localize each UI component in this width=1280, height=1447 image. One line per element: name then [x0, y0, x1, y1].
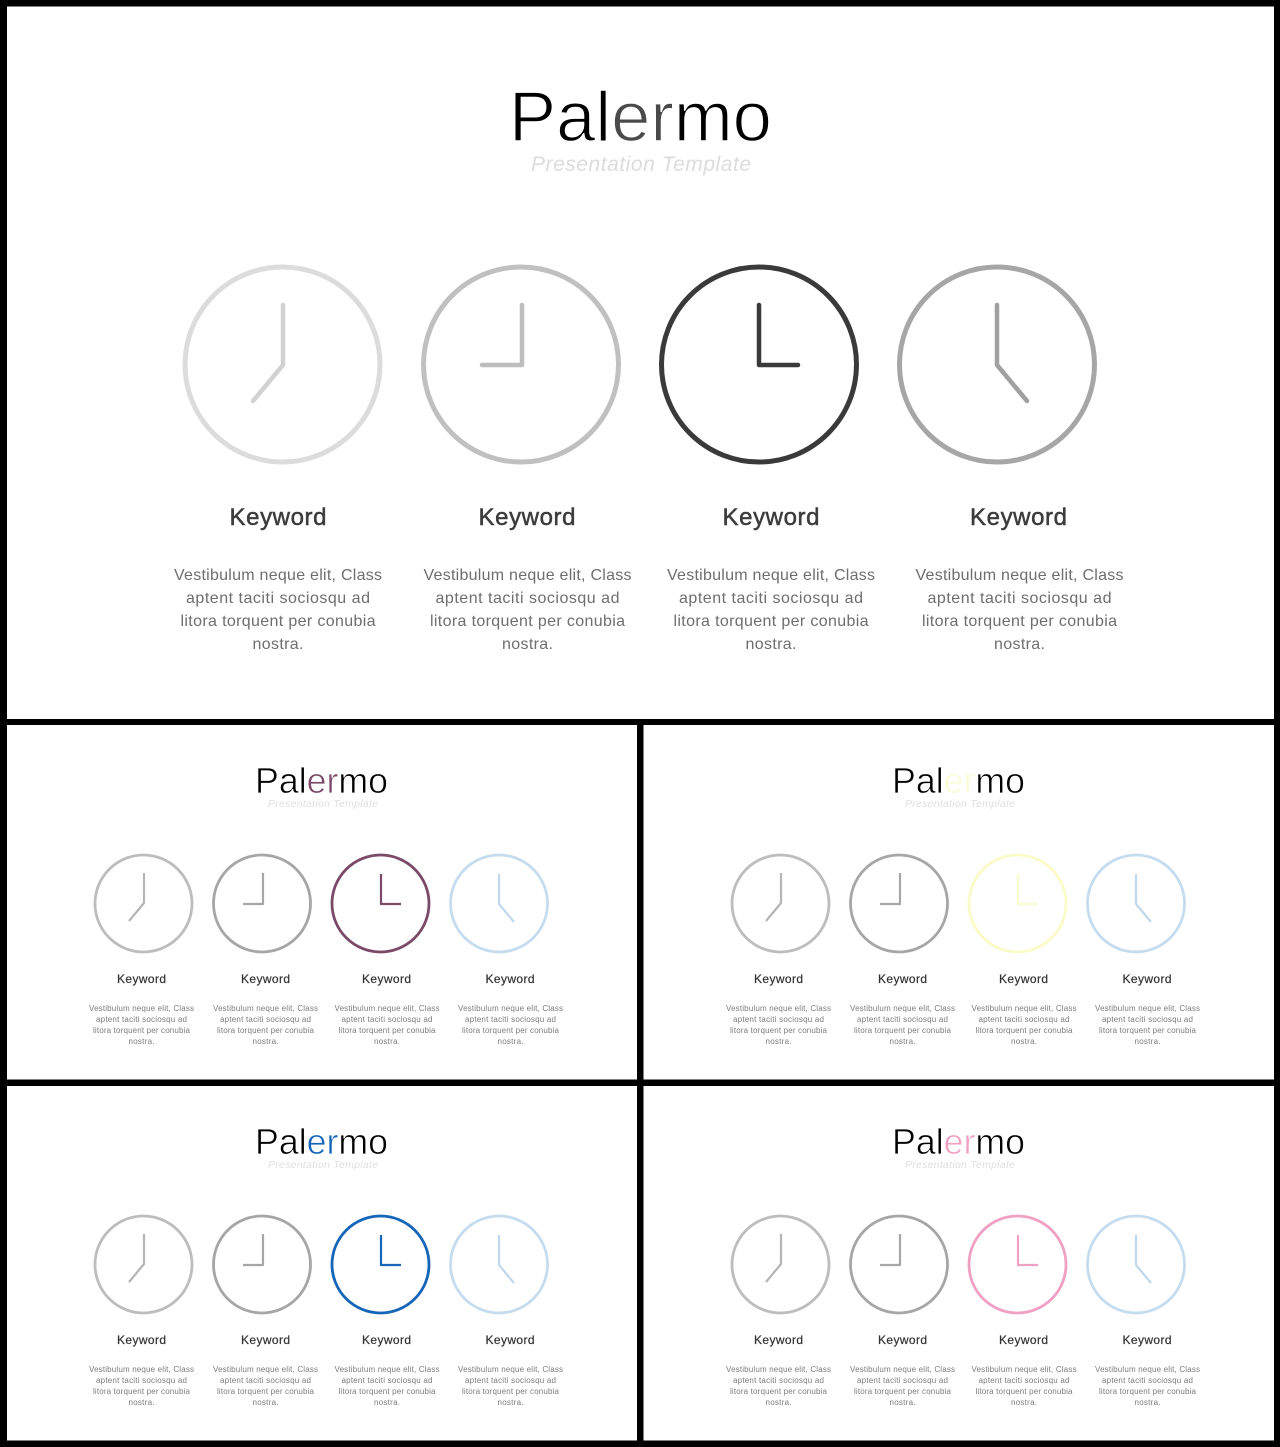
column 1 text: aptent taciti sociosqu ad [96, 1376, 187, 1385]
column 4 text: Keyword [970, 504, 1067, 531]
title: Palermo pale yellow: Palermo [892, 761, 1025, 801]
icon: clock 2 [214, 855, 310, 952]
column 4 text: aptent taciti sociosqu ad [1102, 1015, 1193, 1024]
column 1 text: nostra. [766, 1398, 792, 1407]
column 2 text [424, 504, 632, 653]
column 2 text: nostra. [252, 1398, 278, 1407]
column 2 text: litora torquent per conubia [854, 1026, 952, 1035]
column 2 text: aptent taciti sociosqu ad [220, 1376, 311, 1385]
column 2 text: Keyword [878, 1333, 927, 1347]
column 2 text: Keyword [241, 972, 290, 986]
icon: clock 4 light blue [1088, 1216, 1184, 1313]
column 2 text: aptent taciti sociosqu ad [436, 590, 620, 607]
column 3 text: Keyword [362, 972, 411, 986]
column 3 text: litora torquent per conubia [674, 613, 869, 630]
column 1 text: Vestibulum neque elit, Class [89, 1004, 194, 1013]
column 3 text: litora torquent per conubia [976, 1026, 1073, 1035]
column 3 text: aptent taciti sociosqu ad [978, 1015, 1070, 1024]
subtitle: Presentation Template [268, 798, 378, 810]
column 4 text [458, 972, 563, 1046]
column 3 text: nostra. [1011, 1037, 1037, 1046]
column 1 text: Vestibulum neque elit, Class [726, 1365, 831, 1374]
column 1 text: aptent taciti sociosqu ad [96, 1015, 187, 1024]
column 3 text: nostra. [374, 1398, 400, 1407]
column 4 text: Vestibulum neque elit, Class [458, 1004, 563, 1013]
column 1 text: Vestibulum neque elit, Class [726, 1004, 831, 1013]
subtitle: Presentation Template [905, 798, 1015, 810]
column 3 text: Vestibulum neque elit, Class [334, 1365, 440, 1374]
column 1 text [89, 972, 194, 1046]
column 1 text: nostra. [766, 1037, 792, 1046]
column 3 text: Vestibulum neque elit, Class [972, 1365, 1076, 1374]
column 4 text: Keyword [1122, 972, 1172, 986]
column 1 text: litora torquent per conubia [93, 1026, 191, 1035]
icon: clock 3 pale yellow [969, 855, 1066, 952]
panel: blue theme slide [7, 1086, 637, 1440]
column 1 text: Keyword [117, 1333, 166, 1347]
column 3 text: nostra. [746, 636, 796, 653]
column 2 text: litora torquent per conubia [854, 1387, 952, 1396]
title: Palermo blue: Palermo [255, 1122, 388, 1162]
column 3 text [972, 1333, 1076, 1407]
column 1 text: Keyword [230, 504, 326, 531]
column 2 text [850, 972, 955, 1046]
column 4 text: Vestibulum neque elit, Class [1095, 1004, 1200, 1013]
column 3 text: Keyword [999, 1333, 1048, 1347]
icon: clock 4 light blue [450, 1216, 548, 1313]
column 1 text: Keyword [754, 972, 803, 986]
column 2 text: Vestibulum neque elit, Class [424, 567, 632, 584]
column 4 text: Vestibulum neque elit, Class [458, 1365, 563, 1374]
column 2 text: nostra. [890, 1037, 916, 1046]
column 1 text: litora torquent per conubia [730, 1387, 828, 1396]
panel: pink theme slide [644, 1086, 1274, 1440]
column 1 text: aptent taciti sociosqu ad [733, 1015, 824, 1024]
column 2 text: nostra. [890, 1398, 916, 1407]
column 3 text: aptent taciti sociosqu ad [679, 590, 863, 607]
column 4 text: nostra. [994, 636, 1045, 653]
panel: main slide, grey and dark theme [7, 6, 1274, 719]
column 4 text: aptent taciti sociosqu ad [928, 590, 1112, 607]
column 2 text: Vestibulum neque elit, Class [213, 1004, 318, 1013]
column 3 text: Keyword [999, 972, 1048, 986]
title: Palermo plum: Palermo [255, 761, 388, 801]
column 4 text: nostra. [1134, 1398, 1160, 1407]
icon: clock 2 [424, 267, 618, 462]
column 2 text: Vestibulum neque elit, Class [850, 1365, 955, 1374]
column 3 text: nostra. [374, 1037, 400, 1046]
column 3 text [334, 1333, 440, 1407]
column 4 text [1095, 972, 1200, 1046]
subtitle: Presentation Template [531, 153, 751, 176]
column 3 text: Vestibulum neque elit, Class [334, 1004, 440, 1013]
icon: clock 1 [732, 855, 829, 952]
icon: clock 2 [214, 1216, 310, 1313]
column 4 text: litora torquent per conubia [462, 1026, 560, 1035]
column 1 text: nostra. [128, 1037, 154, 1046]
column 2 text [213, 1333, 318, 1407]
column 2 text: litora torquent per conubia [217, 1387, 315, 1396]
column 2 text [213, 972, 318, 1046]
subtitle: Presentation Template [905, 1159, 1015, 1171]
column 2 text: litora torquent per conubia [430, 613, 625, 630]
column 1 text [89, 1333, 194, 1407]
column 4 text: Keyword [1122, 1333, 1172, 1347]
column 4 text: nostra. [498, 1037, 524, 1046]
column 2 text [850, 1333, 955, 1407]
column 3 text [334, 972, 440, 1046]
icon: clock 1 [732, 1216, 829, 1313]
icon: clock 4 light blue [450, 855, 548, 952]
column 2 text: Vestibulum neque elit, Class [213, 1365, 318, 1374]
column 3 text: aptent taciti sociosqu ad [342, 1015, 432, 1024]
column 2 text: litora torquent per conubia [217, 1026, 315, 1035]
icon: clock 1 [95, 1216, 192, 1313]
column 3 text: aptent taciti sociosqu ad [342, 1376, 432, 1385]
column 2 text: aptent taciti sociosqu ad [857, 1015, 948, 1024]
column 4 text: litora torquent per conubia [922, 613, 1117, 630]
column 4 text: aptent taciti sociosqu ad [465, 1376, 556, 1385]
column 4 text: litora torquent per conubia [462, 1387, 560, 1396]
column 4 text: aptent taciti sociosqu ad [1102, 1376, 1193, 1385]
column 2 text: nostra. [502, 636, 553, 653]
column 2 text: Keyword [878, 972, 927, 986]
column 4 text: nostra. [1134, 1037, 1160, 1046]
icon: clock 1 [95, 855, 192, 952]
icon: clock 3, highlighted [662, 267, 856, 462]
column 1 text: Keyword [754, 1333, 803, 1347]
column 3 text: litora torquent per conubia [338, 1387, 436, 1396]
icon: clock 3 blue [332, 1216, 429, 1313]
column 3 text: aptent taciti sociosqu ad [978, 1376, 1070, 1385]
icon: clock 2 [850, 1216, 948, 1313]
column 4 text: nostra. [498, 1398, 524, 1407]
icon: clock 4 [900, 267, 1094, 462]
column 4 text: Keyword [486, 1333, 534, 1347]
column 3 text: litora torquent per conubia [976, 1387, 1073, 1396]
icon: clock 4 light blue [1088, 855, 1184, 952]
column 2 text: aptent taciti sociosqu ad [220, 1015, 311, 1024]
column 4 text: Vestibulum neque elit, Class [1095, 1365, 1200, 1374]
column 1 text: aptent taciti sociosqu ad [733, 1376, 824, 1385]
column 3 text: litora torquent per conubia [338, 1026, 436, 1035]
column 1 text: Keyword [117, 972, 166, 986]
column 3 text [972, 972, 1076, 1046]
panel: pale yellow theme slide [644, 725, 1274, 1080]
column 1 text [726, 1333, 831, 1407]
column 2 text: nostra. [252, 1037, 278, 1046]
column 4 text [916, 504, 1124, 653]
icon: clock 3 pink [969, 1216, 1066, 1313]
column 2 text: Keyword [478, 504, 576, 531]
column 2 text: Keyword [241, 1333, 290, 1347]
column 4 text: Vestibulum neque elit, Class [916, 567, 1124, 584]
column 4 text: litora torquent per conubia [1099, 1387, 1197, 1396]
column 3 text: Keyword [362, 1333, 411, 1347]
icon: clock 2 [850, 855, 948, 952]
column 1 text: litora torquent per conubia [730, 1026, 828, 1035]
column 1 text: nostra. [128, 1398, 154, 1407]
column 4 text: litora torquent per conubia [1099, 1026, 1197, 1035]
column 1 text: litora torquent per conubia [93, 1387, 191, 1396]
column 2 text: Vestibulum neque elit, Class [850, 1004, 955, 1013]
subtitle: Presentation Template [268, 1159, 378, 1171]
column 1 text [726, 972, 831, 1046]
column 3 text: Vestibulum neque elit, Class [667, 567, 875, 584]
column 4 text: aptent taciti sociosqu ad [465, 1015, 556, 1024]
title: Palermo pink: Palermo [892, 1122, 1025, 1162]
column 2 text: aptent taciti sociosqu ad [857, 1376, 948, 1385]
column 3 text [667, 504, 875, 653]
column 4 text [458, 1333, 563, 1407]
column 1 text: nostra. [252, 636, 304, 653]
column 1 text [174, 504, 382, 653]
column 3 text: Vestibulum neque elit, Class [972, 1004, 1076, 1013]
column 1 text: Vestibulum neque elit, Class [89, 1365, 194, 1374]
column 4 text [1095, 1333, 1200, 1407]
title: Palermo: Palermo [509, 77, 772, 156]
icon: clock 1 [185, 267, 380, 462]
column 3 text: nostra. [1011, 1398, 1037, 1407]
column 1 text: aptent taciti sociosqu ad [186, 590, 370, 607]
column 4 text: Keyword [486, 972, 534, 986]
column 1 text: Vestibulum neque elit, Class [174, 567, 382, 584]
panel: plum theme slide [7, 725, 637, 1080]
column 1 text: litora torquent per conubia [180, 613, 376, 630]
icon: clock 3 plum [332, 855, 429, 952]
column 3 text: Keyword [722, 504, 820, 531]
